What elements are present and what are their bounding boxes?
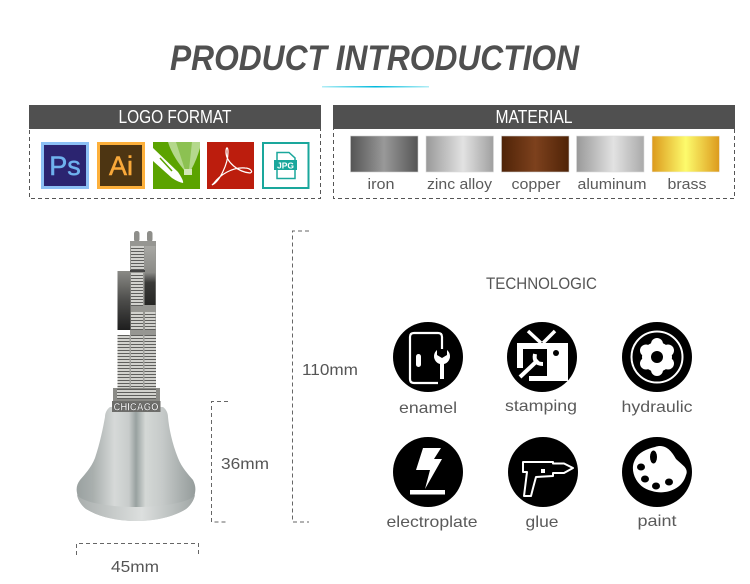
icon: JPG file: JPG — [277, 160, 294, 170]
swatch: aluminum — [576, 136, 646, 193]
panel: logo format — [29, 105, 321, 198]
icon group: electroplate: electroplate — [386, 514, 478, 531]
bell body — [77, 407, 195, 521]
dimension: 45mm width: 45mm — [111, 559, 159, 576]
icon: Photoshop: Ps — [49, 151, 81, 181]
material header — [333, 105, 735, 129]
icon: Acrobat — [207, 142, 254, 189]
tower — [113, 231, 160, 403]
logo format header — [29, 105, 321, 129]
icon group: hydraulic — [622, 322, 692, 416]
swatch: zinc alloy: zinc alloy — [427, 176, 493, 193]
dimension: 36mm height — [212, 402, 269, 522]
icon group: enamel: enamel — [399, 400, 457, 417]
icon: Illustrator — [97, 142, 145, 189]
swatch: brass — [652, 136, 720, 193]
icon group: hydraulic: hydraulic — [622, 399, 692, 416]
swatch: brass: brass — [668, 176, 706, 193]
icon group: stamping: stamping — [505, 398, 577, 415]
dimension: 36mm height: 36mm — [221, 456, 269, 473]
dimension: 45mm width — [76, 544, 198, 576]
swatch: iron: iron — [368, 176, 394, 193]
icon group: glue: glue — [526, 514, 559, 531]
icon group: paint: paint — [638, 513, 677, 530]
icon: JPG file — [263, 143, 308, 188]
swatch: iron — [350, 136, 418, 193]
swatch: copper: copper — [512, 176, 560, 193]
title underline — [322, 86, 429, 88]
icon group: enamel — [393, 322, 463, 417]
material header: MATERIAL — [496, 107, 572, 127]
swatch: copper — [502, 136, 569, 193]
panel: material — [333, 105, 735, 198]
icon group: electroplate — [386, 437, 478, 531]
icon group: stamping — [505, 322, 577, 415]
swatch: aluminum: aluminum — [578, 176, 646, 193]
swatch: zinc alloy — [426, 136, 494, 193]
dimension: 110mm height — [292, 231, 358, 522]
logo format header: LOGO FORMAT — [118, 107, 232, 127]
icon: CorelDRAW — [153, 142, 200, 189]
icon group: glue — [508, 437, 578, 531]
Chicago plaque: CHICAGO — [114, 402, 159, 414]
dimension: 110mm height: 110mm — [302, 362, 358, 379]
technologic heading: TECHNOLOGIC — [486, 274, 597, 293]
title: PRODUCT INTRODUCTION — [170, 39, 580, 78]
icon group: paint — [622, 437, 692, 530]
icon: Illustrator: Ai — [109, 151, 133, 181]
product: Chicago tower bell — [77, 231, 195, 521]
icon: Photoshop — [41, 142, 89, 189]
